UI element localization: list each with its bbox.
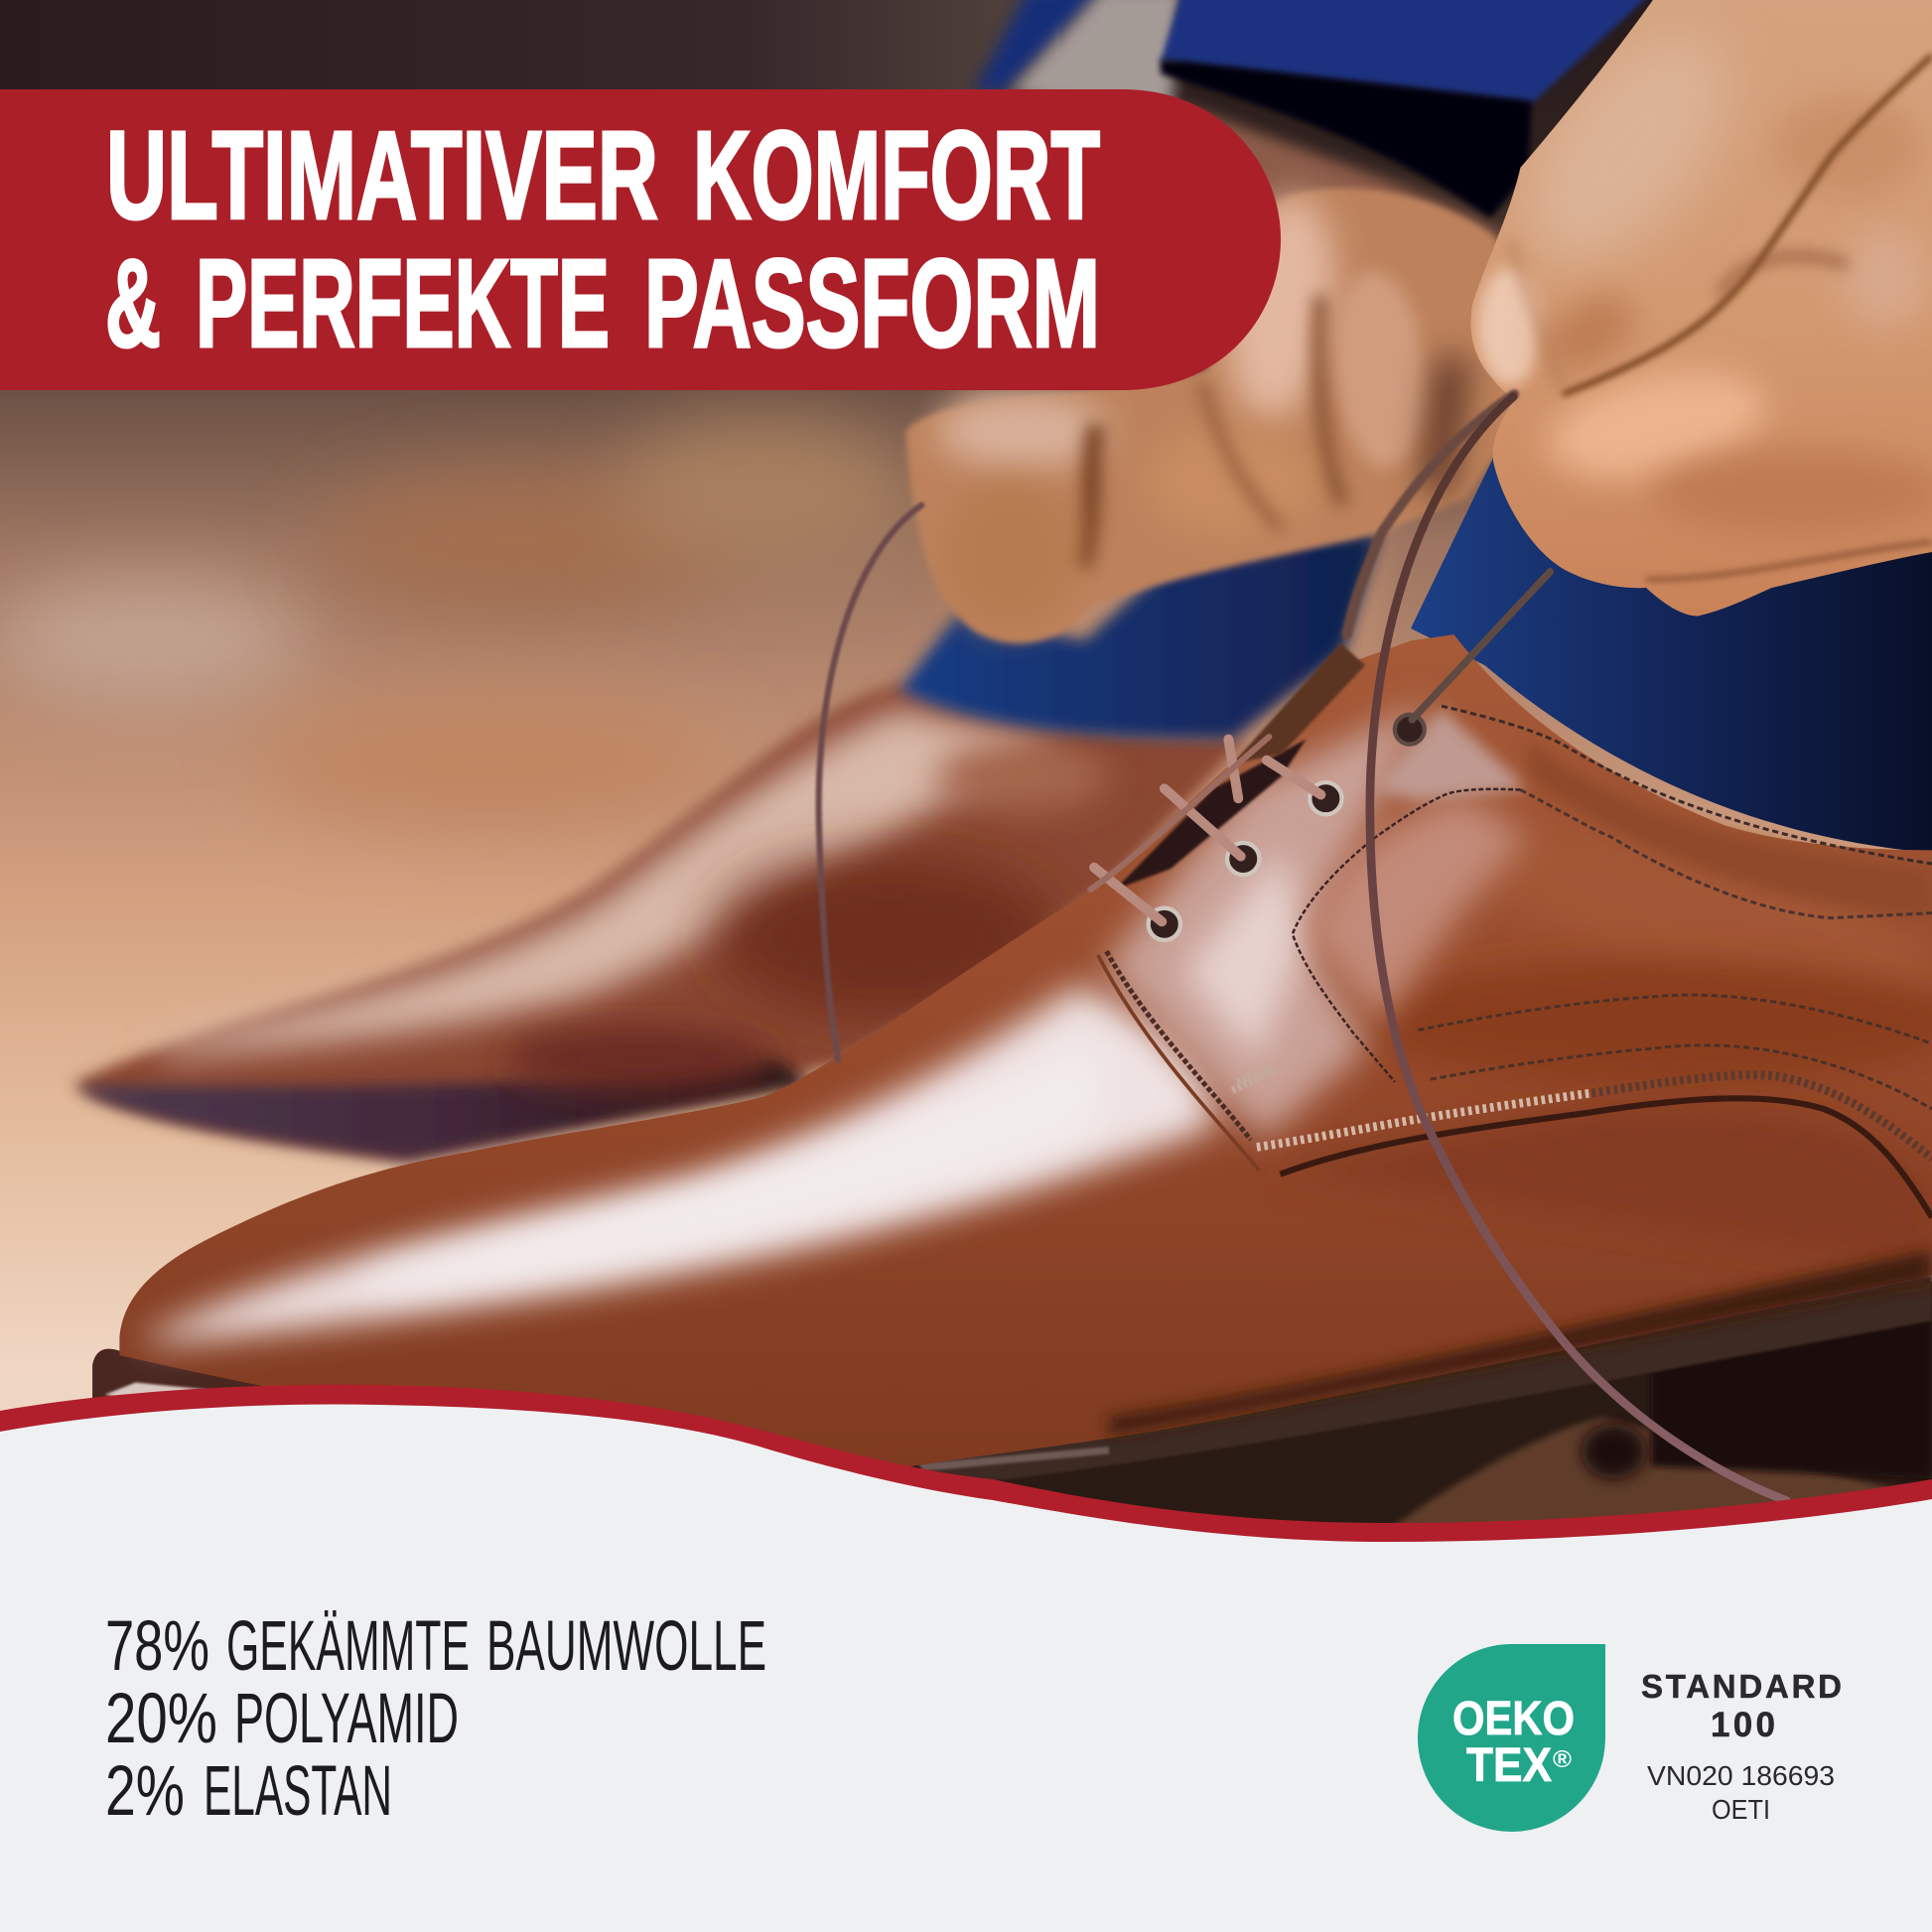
material composition: 20% — [105, 1680, 217, 1758]
front shoe — [92, 634, 1932, 1553]
left hand — [905, 188, 1528, 643]
left sock, out of focus — [899, 532, 1380, 740]
registered mark: ® — [1553, 1746, 1572, 1773]
title banner — [0, 89, 1281, 390]
material composition: ELASTAN — [204, 1752, 392, 1831]
laces across the eyelets — [1090, 737, 1320, 921]
title line 2 — [105, 233, 1100, 373]
right sock — [1411, 450, 1932, 853]
TEX wordmark: TEX — [1466, 1739, 1552, 1792]
back shoe, out of focus — [73, 684, 1244, 1161]
OEKO-TEX logo — [1418, 1644, 1842, 1832]
title line 2: PASSFORM — [644, 233, 1100, 373]
stitching seams — [1098, 706, 1932, 1217]
institute: OETI — [1712, 1794, 1770, 1825]
leather shading and highlights — [145, 702, 1932, 1436]
shoelaces — [819, 394, 1787, 1501]
material composition: 2% — [105, 1752, 185, 1831]
right hand — [1471, 0, 1932, 617]
OEKO wordmark: OEKO — [1452, 1693, 1575, 1745]
ground and sole — [92, 1276, 1932, 1553]
red wave band — [0, 1385, 1932, 1588]
certificate number: VN020 186693 — [1647, 1760, 1835, 1791]
material composition: 78% — [105, 1607, 209, 1686]
title line 1: ULTIMATIVER — [106, 105, 658, 245]
title line 2: & — [105, 233, 161, 373]
eyelets — [1149, 715, 1425, 940]
title line 2: PERFEKTE — [196, 233, 610, 373]
material composition: BAUMWOLLE — [486, 1607, 766, 1686]
material composition: GEKÄMMTE — [226, 1607, 470, 1686]
100 label: 100 — [1711, 1706, 1775, 1744]
STANDARD label: STANDARD — [1641, 1668, 1842, 1705]
icon: teardrop badge — [1418, 1644, 1605, 1832]
bottom panel — [0, 1404, 1932, 1932]
title line 1: KOMFORT — [693, 105, 1100, 245]
trousers and blurred backdrop, top centre — [973, 0, 1657, 407]
leather upper — [119, 634, 1932, 1478]
material composition — [105, 1607, 766, 1831]
material composition: POLYAMID — [234, 1680, 459, 1758]
tongue gap and lace tab — [1115, 643, 1365, 890]
